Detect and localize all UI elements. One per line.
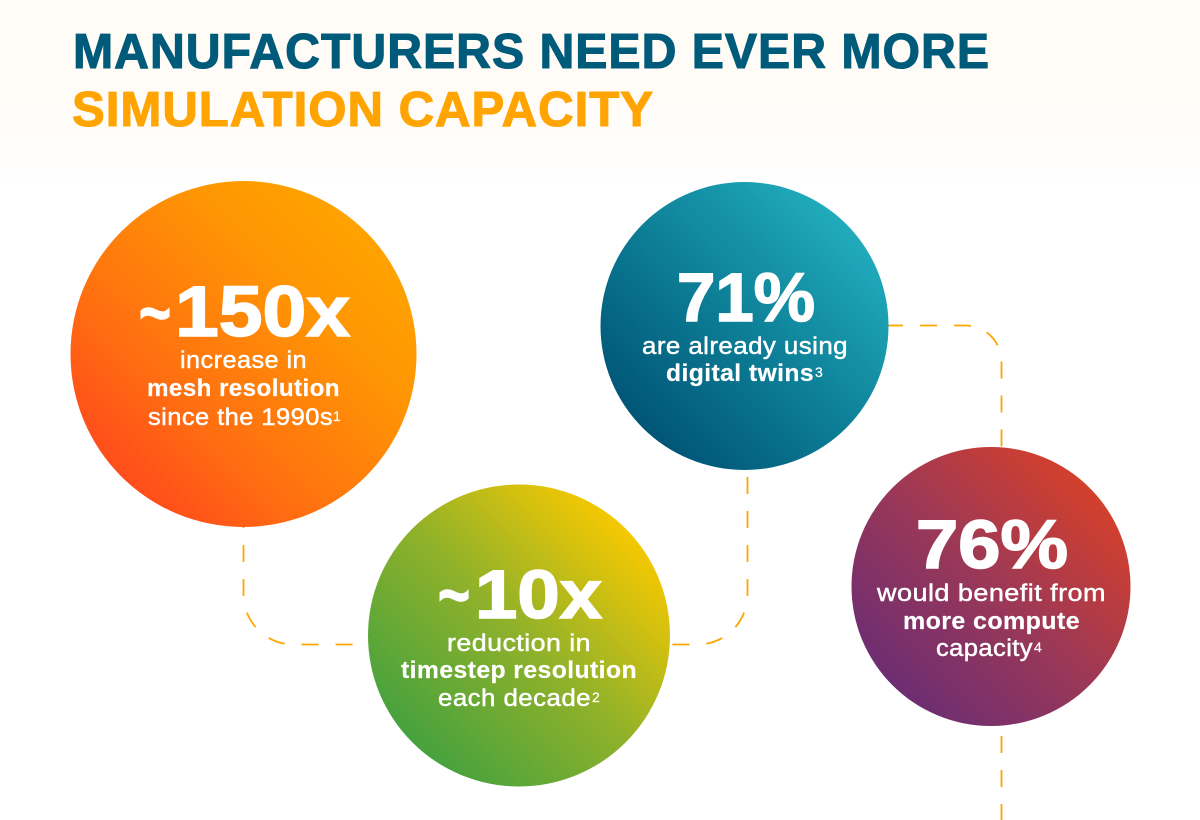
text: timestep resolution caption	[401, 630, 637, 712]
text: mesh resolution caption: 1	[333, 408, 341, 424]
arrow: dashed connector mesh to timestep	[243, 511, 355, 644]
text: mesh resolution caption: since the 1990s	[148, 404, 333, 431]
stat: ~150x: ~	[139, 275, 171, 351]
text: compute capacity caption: capacity	[936, 635, 1033, 662]
text: compute capacity caption: 4	[1034, 639, 1042, 655]
title	[72, 25, 990, 137]
stat: 71%: 71%	[677, 259, 815, 336]
stat: ~150x: 150x	[175, 273, 350, 352]
arrow: dashed connector compute downward	[1000, 736, 1002, 820]
text: timestep resolution caption: 2	[592, 689, 600, 705]
stat: ~10x: ~	[438, 557, 470, 633]
panel: compute capacity stat	[852, 447, 1130, 726]
text: compute capacity caption: would benefit from	[876, 580, 1106, 607]
text: digital twins caption	[642, 333, 848, 387]
text: mesh resolution caption: mesh resolution	[147, 375, 340, 402]
title line 2: SIMULATION CAPACITY	[72, 83, 654, 137]
stat: ~10x: 10x	[475, 556, 602, 633]
title line 1: MANUFACTURERS NEED EVER MORE	[73, 25, 990, 79]
arrow: dashed connector timestep to digital twins	[672, 477, 748, 644]
panel: digital twins stat	[600, 182, 888, 470]
text: mesh resolution caption	[147, 347, 341, 431]
text: digital twins caption: are already using	[642, 333, 848, 360]
stat: 76%: 76%	[916, 506, 1068, 583]
panel: timestep resolution stat	[368, 484, 670, 786]
panel: mesh resolution stat	[70, 181, 416, 527]
text: timestep resolution caption: each decade	[438, 685, 591, 712]
arrow: dashed connector digital twins to compute	[886, 325, 1002, 447]
text: timestep resolution caption: reduction in	[447, 630, 591, 657]
text: timestep resolution caption: timestep resolution	[401, 657, 637, 684]
text: mesh resolution caption: increase in	[180, 347, 307, 374]
text: digital twins caption: digital twins	[666, 360, 814, 387]
text: digital twins caption: 3	[815, 364, 823, 380]
text: compute capacity caption	[876, 580, 1106, 662]
text: compute capacity caption: more compute	[903, 608, 1080, 635]
